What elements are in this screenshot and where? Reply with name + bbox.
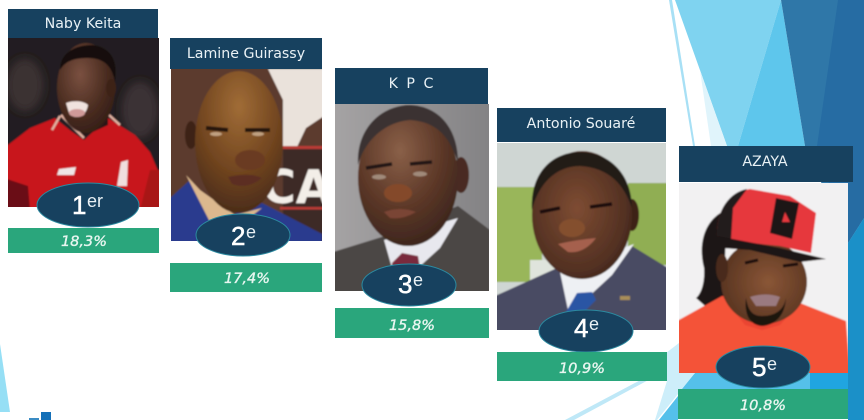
photo: Antonio Souaré bbox=[495, 141, 668, 332]
rank badge: 2e bbox=[196, 214, 290, 256]
score bar: 10,8% bbox=[678, 389, 848, 419]
rank badge: 1er: 1 bbox=[72, 190, 86, 220]
rank badge: 3e bbox=[362, 264, 456, 306]
score bar: 15,8% bbox=[335, 308, 489, 338]
rank badge: 4e: 4 bbox=[574, 313, 588, 343]
rank badge: 4e bbox=[539, 310, 633, 352]
rank badge: 1er bbox=[37, 183, 139, 227]
rank badge: 2e: e bbox=[246, 222, 256, 242]
rank badge: 5e: 5 bbox=[752, 352, 766, 382]
header: K P C bbox=[335, 68, 488, 104]
score bar: 10,8%: 10,8% bbox=[740, 398, 786, 414]
rank badge: 3e: 3 bbox=[398, 269, 412, 299]
score bar: 15,8%: 15,8% bbox=[389, 318, 435, 334]
header: Naby Keita bbox=[8, 9, 158, 38]
header: Lamine Guirassy: Lamine Guirassy bbox=[187, 46, 305, 62]
header: AZAYA: AZAYA bbox=[742, 154, 788, 170]
rank badge: 1er: er bbox=[87, 191, 103, 211]
score bar: 17,4% bbox=[170, 263, 322, 292]
photo: KPC bbox=[333, 102, 491, 293]
rank badge: 5e: e bbox=[767, 354, 777, 374]
photo: Naby Keita bbox=[4, 36, 162, 210]
header: Antonio Souaré bbox=[497, 108, 666, 142]
score bar: 10,9%: 10,9% bbox=[559, 361, 605, 377]
header: Naby Keita: Naby Keita bbox=[45, 16, 121, 32]
photo: Lamine Guirassy: CA bbox=[262, 160, 332, 214]
score bar: 18,3%: 18,3% bbox=[61, 234, 107, 250]
photo: AZAYA bbox=[677, 181, 850, 375]
photo: Lamine Guirassy bbox=[168, 67, 332, 243]
header: K P C: K P C bbox=[389, 76, 435, 92]
score bar: 18,3% bbox=[8, 228, 159, 253]
rank badge: 3e: e bbox=[413, 270, 423, 290]
rank badge: 5e bbox=[716, 346, 810, 388]
header: Antonio Souaré: Antonio Souaré bbox=[527, 116, 635, 132]
header: Lamine Guirassy bbox=[170, 38, 322, 69]
score bar: 17,4%: 17,4% bbox=[224, 271, 270, 287]
header: AZAYA bbox=[679, 146, 853, 182]
rank badge: 2e: 2 bbox=[231, 221, 245, 251]
score bar: 10,9% bbox=[497, 352, 667, 381]
rank badge: 4e: e bbox=[589, 314, 599, 334]
